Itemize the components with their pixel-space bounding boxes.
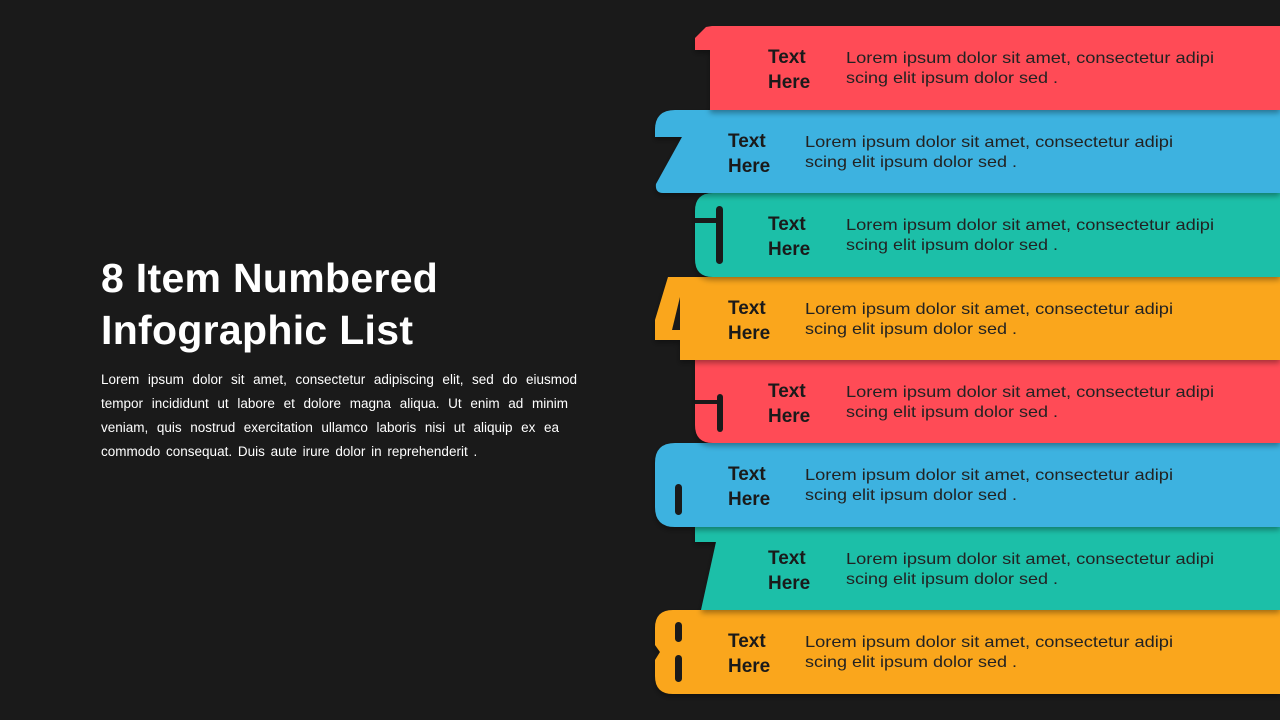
bar 4	[655, 277, 1280, 360]
bar 2: scing elit ipsum dolor sed .	[805, 154, 1017, 171]
bar 5: Here	[768, 406, 810, 427]
bar 3: Text	[768, 214, 806, 235]
bar 6	[655, 443, 1280, 527]
bar 1	[695, 26, 1280, 110]
bar 7: Text	[768, 548, 806, 569]
bar 2	[655, 110, 1280, 193]
bar 8: Lorem ipsum dolor sit amet, consectetur adipi	[805, 634, 1173, 651]
bar 8	[655, 610, 1280, 694]
description paragraph	[101, 372, 577, 459]
bar 8: Here	[728, 656, 770, 677]
bar 6: Lorem ipsum dolor sit amet, consectetur adipi	[805, 467, 1173, 484]
description paragraph: tempor incididunt ut labore et dolore magna aliqua. Ut enim ad minim	[101, 396, 568, 411]
bar 1: Text	[768, 47, 806, 68]
bar 1: Lorem ipsum dolor sit amet, consectetur adipi	[846, 50, 1214, 67]
bar 1: scing elit ipsum dolor sed .	[846, 70, 1058, 87]
bar 7: Lorem ipsum dolor sit amet, consectetur adipi	[846, 551, 1214, 568]
bar 3: scing elit ipsum dolor sed .	[846, 237, 1058, 254]
bar 8: Text	[728, 631, 766, 652]
bar 2: Text	[728, 131, 766, 152]
bar 7: Here	[768, 573, 810, 594]
bar 5	[695, 360, 1280, 443]
bar 6: Text	[728, 464, 766, 485]
description paragraph: Lorem ipsum dolor sit amet, consectetur adipiscing elit, sed do eiusmod	[101, 372, 577, 387]
bar 3: Here	[768, 239, 810, 260]
bar 3	[695, 193, 1280, 277]
bar 5: Text	[768, 381, 806, 402]
bar 3: Lorem ipsum dolor sit amet, consectetur adipi	[846, 217, 1214, 234]
bar 1: Here	[768, 72, 810, 93]
bar 4: scing elit ipsum dolor sed .	[805, 321, 1017, 338]
bar 8: scing elit ipsum dolor sed .	[805, 654, 1017, 671]
bar 2: Lorem ipsum dolor sit amet, consectetur adipi	[805, 134, 1173, 151]
title: 8 Item Numbered	[101, 255, 438, 301]
bar 6: Here	[728, 489, 770, 510]
bar 7	[695, 527, 1280, 610]
bar 2: Here	[728, 156, 770, 177]
bar 4: Lorem ipsum dolor sit amet, consectetur adipi	[805, 301, 1173, 318]
bar 5: Lorem ipsum dolor sit amet, consectetur adipi	[846, 384, 1214, 401]
description paragraph: commodo consequat. Duis aute irure dolor in reprehenderit .	[101, 444, 477, 459]
bar 4: Text	[728, 298, 766, 319]
bar 4: Here	[728, 323, 770, 344]
bar 7: scing elit ipsum dolor sed .	[846, 571, 1058, 588]
title	[101, 255, 438, 353]
bar 6: scing elit ipsum dolor sed .	[805, 487, 1017, 504]
title: Infographic List	[101, 307, 413, 353]
bar 5: scing elit ipsum dolor sed .	[846, 404, 1058, 421]
description paragraph: veniam, quis nostrud exercitation ullamco laboris nisi ut aliquip ex ea	[101, 420, 559, 435]
